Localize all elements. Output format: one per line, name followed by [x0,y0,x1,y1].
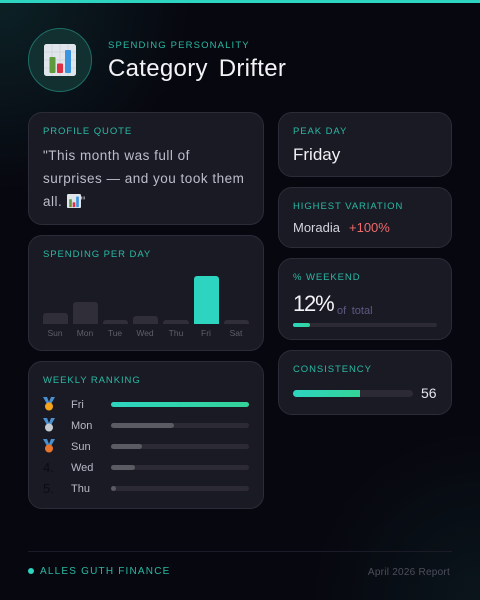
rank 1 row: Fri [71,399,84,411]
bar chart: Sat [230,328,242,338]
rank 4 row: Wed [71,462,93,474]
panel: highest variation [278,187,452,248]
bar chart: Wed [136,328,154,338]
footer date: April 2026 Report [368,567,450,578]
panel: spending per day [28,235,264,351]
footer rule [28,551,452,552]
panel: weekly ranking [28,361,264,509]
title: Category Drifter [108,55,286,82]
quote text [43,148,244,209]
quote text: all. " [43,194,86,209]
bar chart: Sun [47,328,63,338]
weekend note: of total [337,305,373,317]
rank 1 row [43,397,249,411]
consistency value: 56 [421,385,437,401]
rank 3 row: Sun [71,441,91,453]
top accent bar [0,0,480,3]
spending label: SPENDING PER DAY [43,249,151,260]
rank 2 row [43,418,249,432]
rank 5 row: 5. [43,481,54,496]
header eyebrow: SPENDING PERSONALITY [108,40,250,51]
variation label: HIGHEST VARIATION [293,201,403,212]
rank 2 row: Mon [71,420,92,432]
variation percent: +100% [349,220,390,235]
rank 5 row: Thu [71,483,90,495]
rank 5 row [43,481,249,496]
weekend label: % WEEKEND [293,272,360,283]
quote text: surprises — and you took them [43,171,244,186]
variation value: Moradia [293,220,340,235]
panel: profile quote [28,112,264,225]
bar chart: Thu [169,328,183,338]
bar chart: Mon [77,328,93,338]
bar chart: Tue [108,328,122,338]
rank 4 row [43,460,249,475]
panel: peak day [278,112,452,177]
rank 3 row [43,439,249,453]
peak day value: Friday [293,145,340,164]
weekend value: 12% [293,291,333,316]
ranking label: WEEKLY RANKING [43,375,141,386]
quote text: "This month was full of [43,148,190,163]
consistency label: CONSISTENCY [293,364,372,375]
panel: consistency [278,350,452,415]
footer brand: ALLES GUTH FINANCE [40,566,171,577]
weekend progress bar [293,323,437,327]
quote label: PROFILE QUOTE [43,126,132,137]
icon: bar chart badge [28,28,92,92]
rank 4 row: 4. [43,460,54,475]
peak day label: PEAK DAY [293,126,347,137]
bar chart: Fri [201,328,211,338]
consistency progress bar [293,390,413,397]
panel: percent weekend [278,258,452,340]
